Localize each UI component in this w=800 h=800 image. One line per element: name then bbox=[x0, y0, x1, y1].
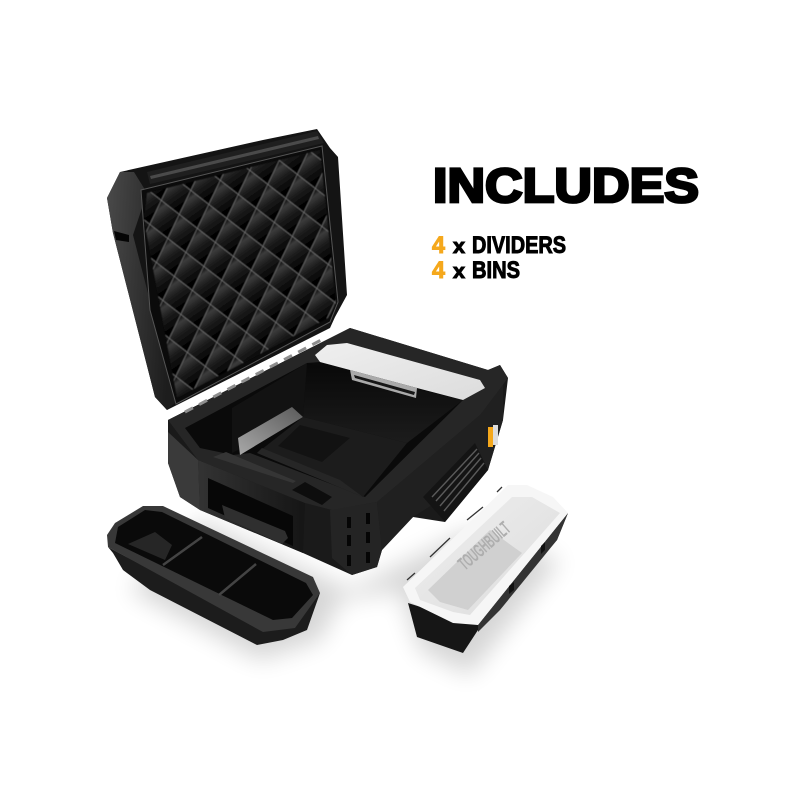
item list bbox=[432, 232, 566, 284]
product: black divider bin bbox=[107, 506, 320, 645]
bin black base bbox=[408, 513, 568, 653]
product: open case bbox=[107, 129, 508, 575]
clips bbox=[509, 542, 545, 594]
body front wall bbox=[198, 460, 305, 553]
bin inner cavity bbox=[115, 510, 313, 620]
lid hinge rail bbox=[147, 131, 324, 184]
lid left side wall bbox=[107, 172, 176, 410]
item: bins bbox=[432, 257, 520, 284]
lid inner frame bbox=[141, 146, 338, 404]
item: bins: 4 bbox=[432, 257, 446, 284]
bin rim bbox=[107, 506, 320, 632]
bin white rim bbox=[403, 485, 568, 625]
light floor strip bbox=[238, 407, 303, 455]
logo badge bbox=[384, 529, 395, 541]
tub left wall bbox=[232, 363, 307, 453]
tub floor bbox=[257, 417, 407, 497]
case lid bbox=[107, 129, 347, 410]
front ledge bbox=[213, 452, 296, 483]
item: dividers: x bbox=[453, 236, 465, 258]
edge notches bbox=[407, 487, 502, 580]
bin grey recess bbox=[415, 497, 560, 615]
item: dividers: 4 bbox=[432, 232, 446, 259]
product: white-topped bin bbox=[403, 485, 568, 653]
item: bins: BINS bbox=[472, 257, 520, 284]
heading: INCLUDES bbox=[433, 160, 699, 213]
front handle bbox=[222, 505, 288, 544]
item: dividers: DIVIDERS bbox=[472, 232, 566, 259]
corner panel slots bbox=[347, 513, 370, 566]
item: dividers bbox=[432, 232, 566, 259]
hinge clips bbox=[185, 338, 325, 412]
brand text: TOUGHBUILT bbox=[455, 518, 515, 575]
bin dividers bbox=[163, 537, 256, 595]
tub back wall bbox=[303, 363, 463, 443]
front handle recess bbox=[208, 478, 293, 546]
case body bbox=[168, 328, 508, 575]
raised rim bbox=[168, 328, 508, 510]
body corner panel bbox=[330, 502, 382, 575]
stored white bin bbox=[315, 343, 485, 400]
side colour label bbox=[488, 425, 498, 447]
bin outer wall bbox=[108, 547, 320, 645]
body right side wall bbox=[377, 378, 503, 550]
side handle rack bbox=[423, 443, 488, 522]
drop shadows bbox=[130, 520, 560, 675]
item: bins: x bbox=[453, 261, 465, 283]
lid diamond grid bbox=[144, 150, 336, 398]
body left corner bbox=[168, 432, 200, 510]
tub opening bbox=[185, 362, 463, 497]
